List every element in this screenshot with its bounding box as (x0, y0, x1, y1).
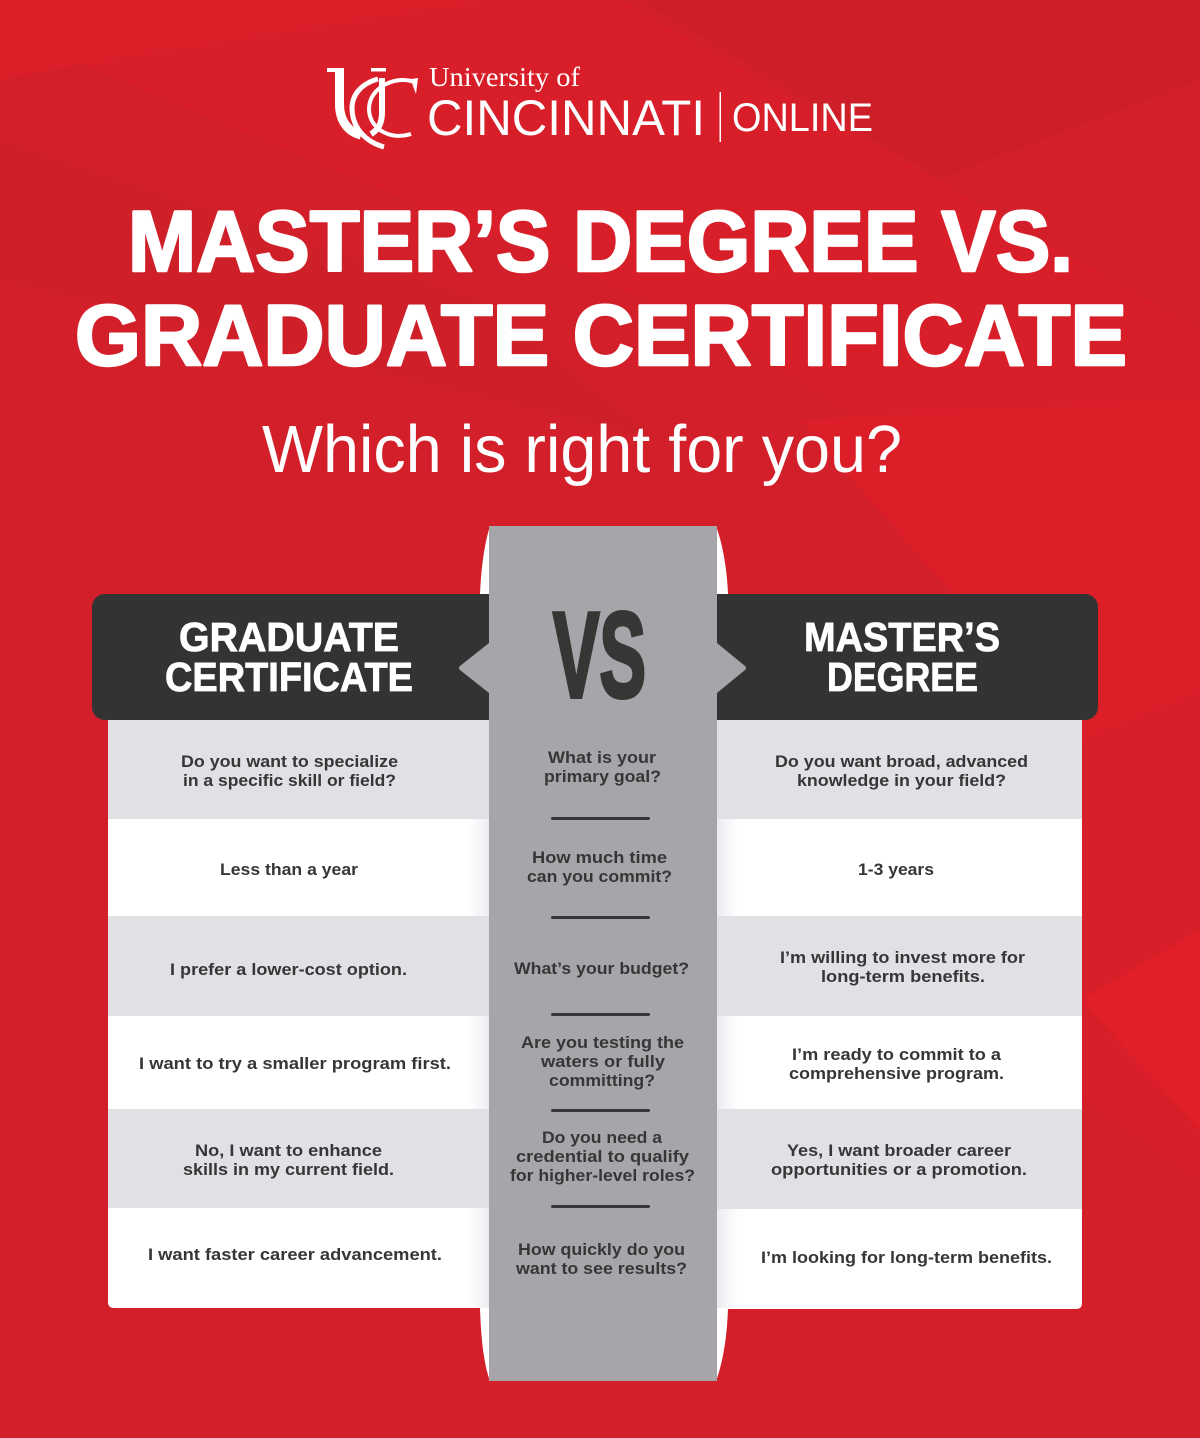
graduate certificate answers: I want faster career advancement. (148, 1245, 442, 1264)
master's degree answers: I’m looking for long-term benefits. (761, 1248, 1052, 1267)
panel: master's degree rows (716, 720, 1082, 1309)
comparison table (92, 526, 1098, 1381)
title (75, 194, 1127, 384)
center questions: How quickly do you (518, 1240, 685, 1259)
white curved backing (480, 526, 728, 1381)
master's degree answers (761, 752, 1052, 1267)
master's degree answers: knowledge in your field? (797, 771, 1006, 790)
VS label: VS (553, 587, 646, 723)
graduate certificate answers: Do you want to specialize (181, 752, 398, 771)
center questions: want to see results? (515, 1259, 687, 1278)
center questions: for higher-level roles? (510, 1166, 695, 1185)
graduate certificate answers: I want to try a smaller program first. (139, 1054, 451, 1073)
graduate certificate answers: Less than a year (220, 860, 358, 879)
master's degree answers: I’m ready to commit to a (792, 1045, 1002, 1064)
center questions: can you commit? (527, 867, 672, 886)
graduate certificate answers: skills in my current field. (183, 1160, 394, 1179)
master's degree answers: opportunities or a promotion. (771, 1160, 1027, 1179)
center questions: How much time (532, 848, 667, 867)
master's degree answers: 1-3 years (858, 860, 934, 879)
heading: graduate certificate (165, 614, 413, 700)
center column (459, 526, 746, 1381)
logo (327, 62, 873, 147)
center questions: What’s your budget? (514, 959, 689, 978)
graduate certificate answers (139, 752, 451, 1264)
center questions (510, 748, 695, 1278)
icon: UC monogram (327, 68, 418, 147)
header bar (92, 594, 1098, 720)
center questions: primary goal? (544, 767, 661, 786)
heading: graduate certificate: GRADUATE (179, 614, 399, 660)
column dividers (551, 817, 650, 1208)
master's degree answers: long-term benefits. (821, 967, 985, 986)
graduate certificate answers: I prefer a lower-cost option. (170, 960, 407, 979)
heading: master's degree (804, 614, 1000, 700)
master's degree answers: Yes, I want broader career (787, 1141, 1011, 1160)
ONLINE: ONLINE (732, 96, 873, 140)
center questions: committing? (549, 1071, 655, 1090)
subtitle: Which is right for you? (262, 412, 902, 487)
title: MASTER’S DEGREE VS. (128, 194, 1073, 290)
heading: master's degree: MASTER’S (804, 614, 1000, 660)
CINCINNATI: CINCINNATI (427, 90, 705, 146)
center questions: Are you testing the (521, 1033, 684, 1052)
graduate certificate answers: No, I want to enhance (195, 1141, 382, 1160)
University of: University of (429, 62, 580, 92)
center questions: waters or fully (540, 1052, 666, 1071)
logo divider (720, 92, 721, 142)
master's degree answers: I’m willing to invest more for (780, 948, 1025, 967)
graduate certificate answers: in a specific skill or field? (183, 771, 396, 790)
heading: master's degree: DEGREE (827, 654, 978, 700)
master's degree answers: Do you want broad, advanced (775, 752, 1028, 771)
panel: graduate certificate rows (108, 720, 490, 1308)
center questions: credential to qualify (516, 1147, 690, 1166)
title: GRADUATE CERTIFICATE (75, 288, 1127, 384)
heading: graduate certificate: CERTIFICATE (165, 654, 413, 700)
master's degree answers: comprehensive program. (789, 1064, 1004, 1083)
center questions: What is your (548, 748, 656, 767)
center questions: Do you need a (542, 1128, 663, 1147)
